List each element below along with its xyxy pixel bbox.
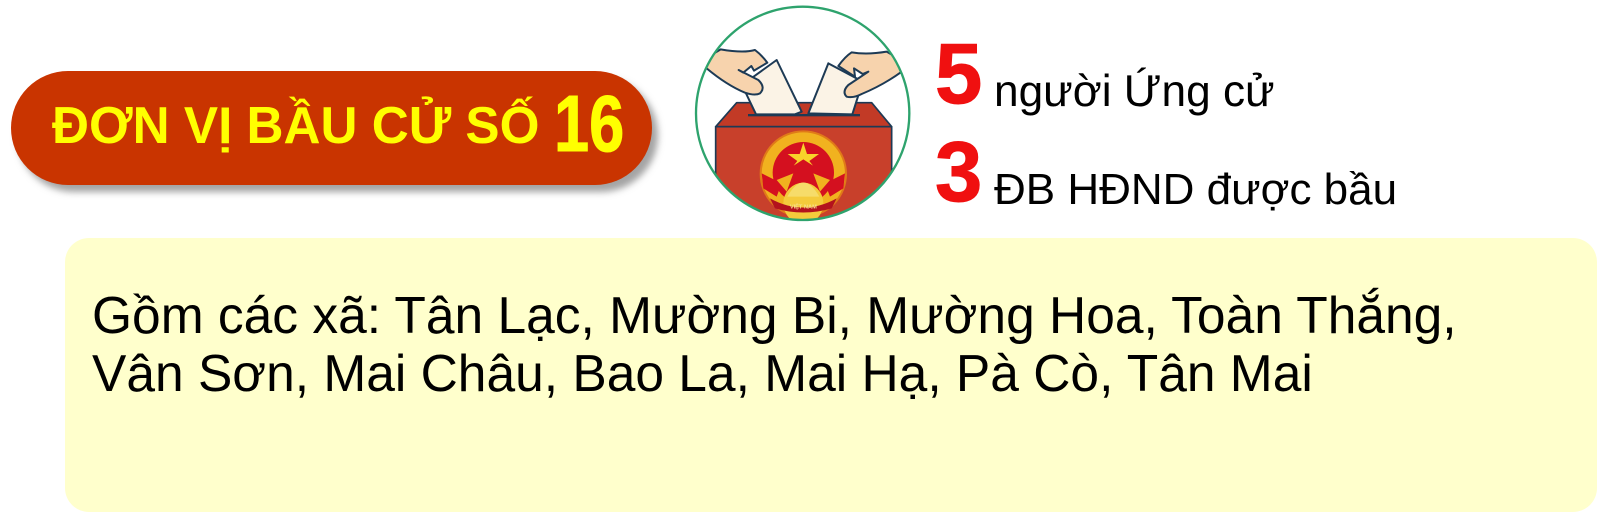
stat: 5 candidates [935, 27, 1275, 122]
number 3: 3 [935, 125, 982, 220]
heading text: ĐƠN VỊ BẦU CỬ SỐ [52, 97, 539, 155]
left ballot [742, 60, 802, 114]
number 5: 5 [935, 27, 982, 122]
right hand [838, 52, 907, 97]
commune text [92, 286, 1457, 402]
right ballot [808, 63, 863, 114]
stat: 3 delegates elected [935, 125, 1397, 220]
left hand [700, 49, 767, 95]
label: người Ứng cử [994, 67, 1275, 116]
national emblem: VIỆT NAM [790, 202, 817, 210]
label: ĐB HĐND được bầu [994, 165, 1397, 214]
panel: list of communes [65, 238, 1597, 512]
commune text: Vân Sơn, Mai Châu, Bao La, Mai Hạ, Pà Cò, Tân Mai [92, 344, 1313, 402]
national emblem [761, 131, 846, 224]
heading pill: electoral unit 16 [11, 71, 652, 185]
heading number 16: 16 [554, 79, 624, 168]
commune text: Gồm các xã: Tân Lạc, Mường Bi, Mường Hoa, Toàn Thắng, [92, 286, 1457, 344]
icon: ballot box with hands and national emblem [694, 6, 910, 222]
ballot box [716, 103, 892, 233]
